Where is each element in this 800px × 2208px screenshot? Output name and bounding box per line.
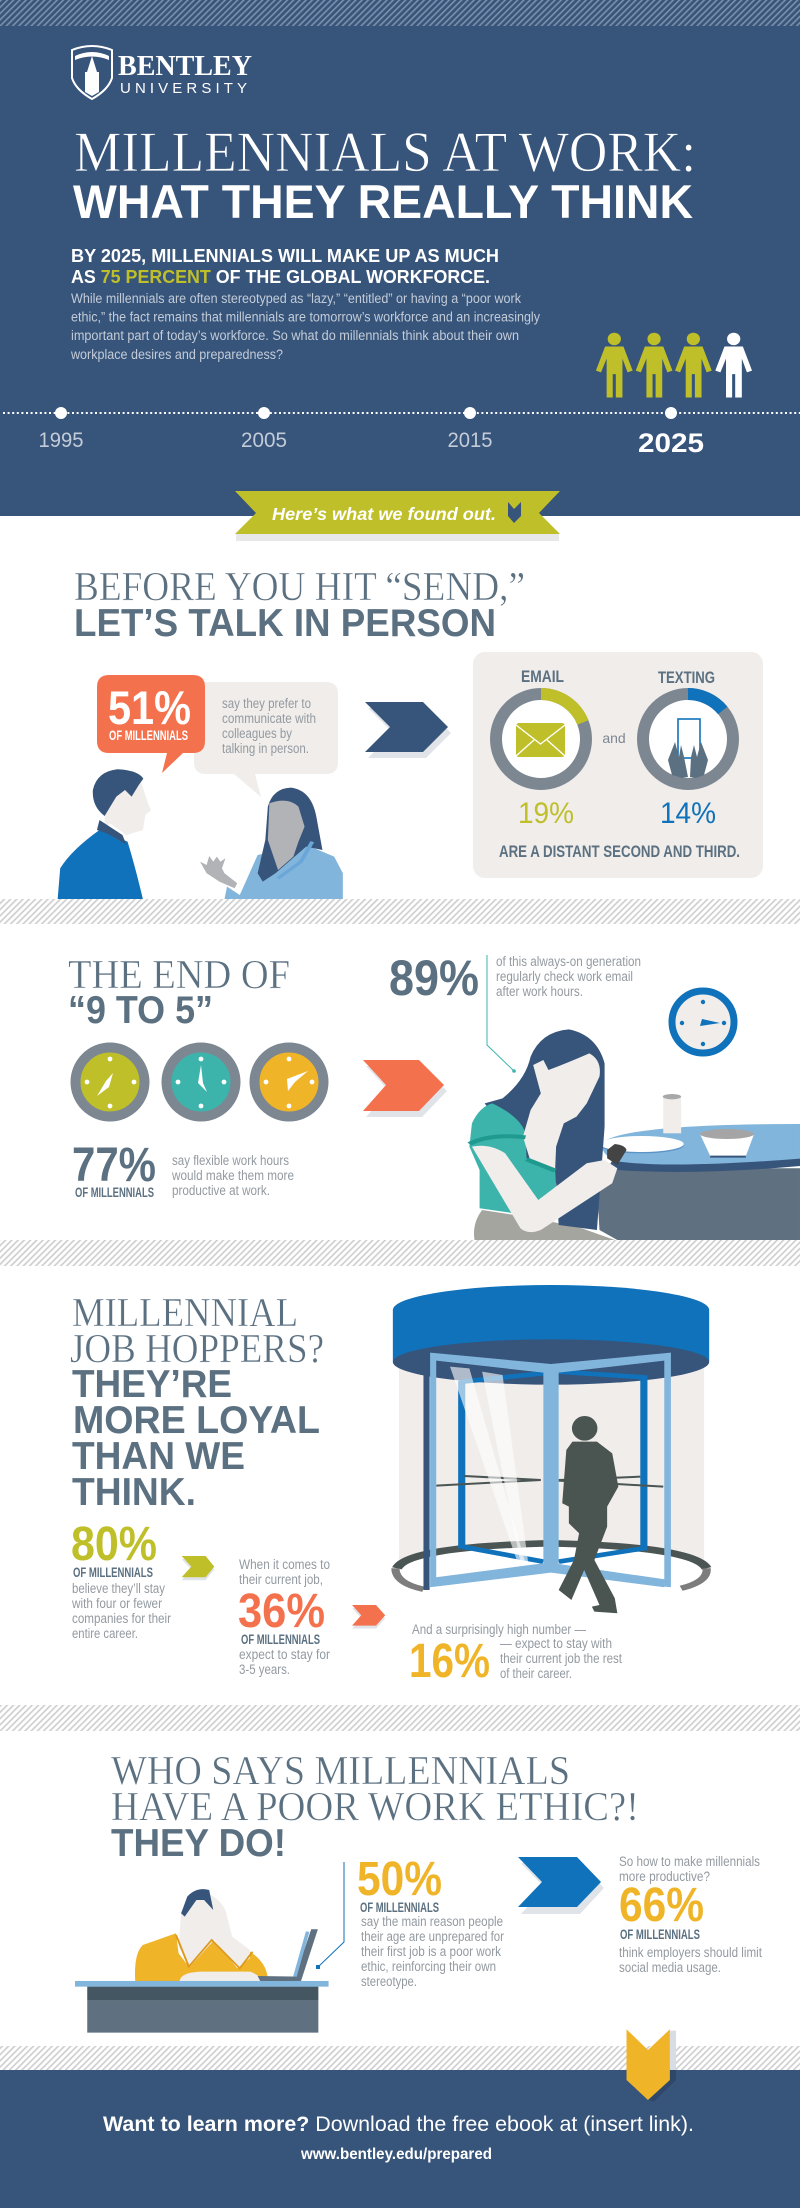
arrow: blue chevron [518, 1857, 604, 1914]
illustration: revolving door with walking man [393, 1285, 709, 1613]
arrow: orange chevron [363, 1060, 447, 1117]
stat: 77%: say flexible work hours [172, 1153, 289, 1168]
speech bubble: say they prefer [194, 682, 338, 797]
timeline: 2015 [448, 429, 492, 452]
stat: 80% [71, 1518, 171, 1641]
stat: 89%: 89% [389, 950, 479, 1006]
stat: 80%: with four or fewer [71, 1596, 162, 1611]
arrow: navy chevron [365, 702, 451, 758]
stat: 16%: of their career. [500, 1666, 572, 1681]
speech bubble: say they prefer: say they prefer to [222, 696, 311, 711]
intro heading [71, 245, 499, 287]
intro heading: BY 2025, MILLENNIALS WILL MAKE UP AS MUCH [71, 245, 499, 266]
stat: 16%: their current job the rest [500, 1651, 622, 1666]
stat: 16%: 16% [409, 1635, 490, 1688]
panel: job hoppers [70, 1285, 709, 1688]
panel: email and texting: EMAIL [521, 667, 564, 686]
stat: 80%: OF MILLENNIALS [73, 1564, 153, 1580]
logo: Bentley University [72, 46, 252, 99]
arrow: small olive chevron [182, 1556, 214, 1580]
panel: footer [0, 2070, 800, 2208]
stat: 89% [389, 950, 641, 1073]
title: MILLENNIALS AT WORK: [74, 121, 696, 184]
intro text: workplace desires and preparedness? [70, 347, 283, 362]
stat: 89%: regularly check work email [496, 969, 633, 984]
illustration: man and woman talking [58, 769, 343, 899]
panel: email and texting: ARE A DISTANT SECOND AND THIRD. [499, 842, 740, 861]
stat: 36%: their current job, [239, 1572, 323, 1587]
speech bubble: 51% of millennials: 51% [108, 681, 191, 734]
logo: Bentley University: UNIVERSITY [120, 80, 247, 97]
stat: 89%: of this always-on generation [496, 954, 641, 969]
heading: MILLENNIAL [72, 1289, 298, 1335]
timeline: 2005 [241, 429, 287, 452]
stat: 36%: 36% [238, 1585, 325, 1638]
stat: 50%: ethic, reinforcing their own [361, 1959, 496, 1974]
heading: LET’S TALK IN PERSON [74, 602, 496, 645]
panel: email and texting [473, 652, 763, 878]
heading: THEY DO! [111, 1822, 286, 1865]
stat: 50%: their age are unprepared for [361, 1929, 504, 1944]
icon: olive clock [76, 1048, 144, 1116]
stat: 77%: 77% [72, 1139, 156, 1192]
chart: email donut 19% [496, 694, 586, 784]
heading: MORE LOYAL [73, 1399, 320, 1442]
heading: “9 TO 5” [68, 989, 213, 1032]
heading: THEY’RE [72, 1363, 232, 1406]
stat: 36%: 3-5 years. [239, 1662, 290, 1677]
heading [68, 951, 290, 1032]
stat: 66%: 66% [619, 1879, 704, 1932]
title: WHAT THEY REALLY THINK [73, 175, 693, 228]
stat: 66%: social media usage. [619, 1960, 721, 1975]
stat: 16%: — expect to stay with [500, 1636, 612, 1651]
speech bubble: say they prefer: colleagues by [222, 726, 292, 741]
panel: email and texting: TEXTING [658, 668, 715, 687]
panel: header [0, 0, 800, 516]
icon: teal clock [166, 1048, 236, 1116]
stat: 16% [409, 1622, 622, 1688]
heading [111, 1747, 639, 1865]
heading [70, 1289, 324, 1514]
panel: end of 9 to 5 [68, 950, 800, 1240]
timeline: 2025 [638, 428, 704, 458]
stat: 66%: OF MILLENNIALS [620, 1926, 700, 1942]
banner: here's what we found out [235, 491, 560, 541]
stat: 77% [72, 1139, 294, 1200]
text: learn more: Want to learn more? Download the free ebook at (insert link). [103, 2113, 694, 2136]
stat: 80%: companies for their [72, 1611, 171, 1626]
panel: poor work ethic [75, 1747, 762, 2033]
icon: hands holding phone [668, 719, 708, 778]
stat: 50%: say the main reason people [361, 1914, 503, 1929]
panel: email and texting: 19% [518, 797, 574, 830]
speech bubble: say they prefer: talking in person. [222, 741, 309, 756]
stat: 80%: 80% [71, 1518, 157, 1571]
stat: 80%: entire career. [72, 1626, 138, 1641]
stat: 66% [619, 1854, 762, 1975]
stat: 16%: And a surprisingly high number — [412, 1622, 586, 1637]
heading: THE END OF [68, 951, 290, 997]
arrow: amber ribbon pointing down [627, 2029, 676, 2102]
illustration: woman at table checking phone [469, 1029, 800, 1240]
stat: 80%: believe they’ll stay [72, 1581, 165, 1596]
intro text: ethic,” the fact remains that millennials are tomorrow’s workforce and an increasingly [71, 310, 540, 324]
intro text: While millennials are often stereotyped as “lazy,” “entitled” or having a “poor work [71, 291, 521, 306]
panel: talk in person [58, 563, 763, 899]
banner: here's what we found out: Here’s what we found out. [272, 504, 496, 524]
stat: 50%: stereotype. [361, 1974, 417, 1989]
speech bubble: 51% of millennials: OF MILLENNIALS [109, 727, 188, 743]
stat: 50%: 50% [357, 1853, 442, 1906]
heading: THINK. [72, 1471, 196, 1514]
stat: 50% [316, 1853, 504, 1989]
icon: amber clock [254, 1048, 324, 1116]
arrow: small orange chevron [352, 1605, 385, 1629]
stat: 36% [238, 1557, 330, 1677]
timeline: 1995 [38, 429, 84, 452]
icon: four people, three of four highlighted [596, 333, 752, 398]
icon: small chevron [508, 502, 521, 523]
speech bubble: 51% of millennials [97, 675, 205, 773]
title [73, 121, 696, 228]
stat: 77%: OF MILLENNIALS [75, 1184, 154, 1200]
stat: 36%: When it comes to [239, 1557, 330, 1572]
chart: texting donut 14% [643, 694, 733, 784]
heading: BEFORE YOU HIT “SEND,” [74, 563, 525, 609]
intro text: important part of today’s workforce. So what do millennials think about their own [71, 328, 519, 343]
heading: JOB HOPPERS? [70, 1325, 324, 1371]
heading: WHO SAYS MILLENNIALS [111, 1747, 570, 1793]
speech bubble: say they prefer: communicate with [222, 711, 316, 726]
panel: email and texting: and [602, 730, 626, 746]
stat: 36%: OF MILLENNIALS [241, 1631, 320, 1647]
intro heading: AS 75 PERCENT OF THE GLOBAL WORKFORCE. [71, 266, 490, 287]
stat: 66%: So how to make millennials [619, 1854, 760, 1869]
icon: wall clock [672, 991, 734, 1053]
illustration: tired man at desk [75, 1889, 329, 2033]
stat: 50%: their first job is a poor work [361, 1944, 501, 1959]
stat: 50%: OF MILLENNIALS [360, 1899, 439, 1915]
heading [74, 563, 525, 645]
stat: 66%: think employers should limit [619, 1945, 762, 1960]
text: url: www.bentley.edu/prepared [300, 2146, 492, 2163]
icon: envelope [516, 723, 565, 757]
panel: email and texting: 14% [660, 797, 716, 830]
stat: 77%: would make them more [171, 1168, 294, 1183]
stat: 66%: more productive? [619, 1869, 710, 1884]
heading: THAN WE [72, 1435, 245, 1478]
timeline [3, 407, 800, 458]
intro text [70, 291, 540, 362]
stat: 36%: expect to stay for [239, 1647, 330, 1662]
stat: 77%: productive at work. [172, 1183, 270, 1198]
stat: 89%: after work hours. [496, 984, 583, 999]
heading: HAVE A POOR WORK ETHIC?! [111, 1783, 639, 1829]
logo: Bentley University: BENTLEY [118, 51, 252, 82]
